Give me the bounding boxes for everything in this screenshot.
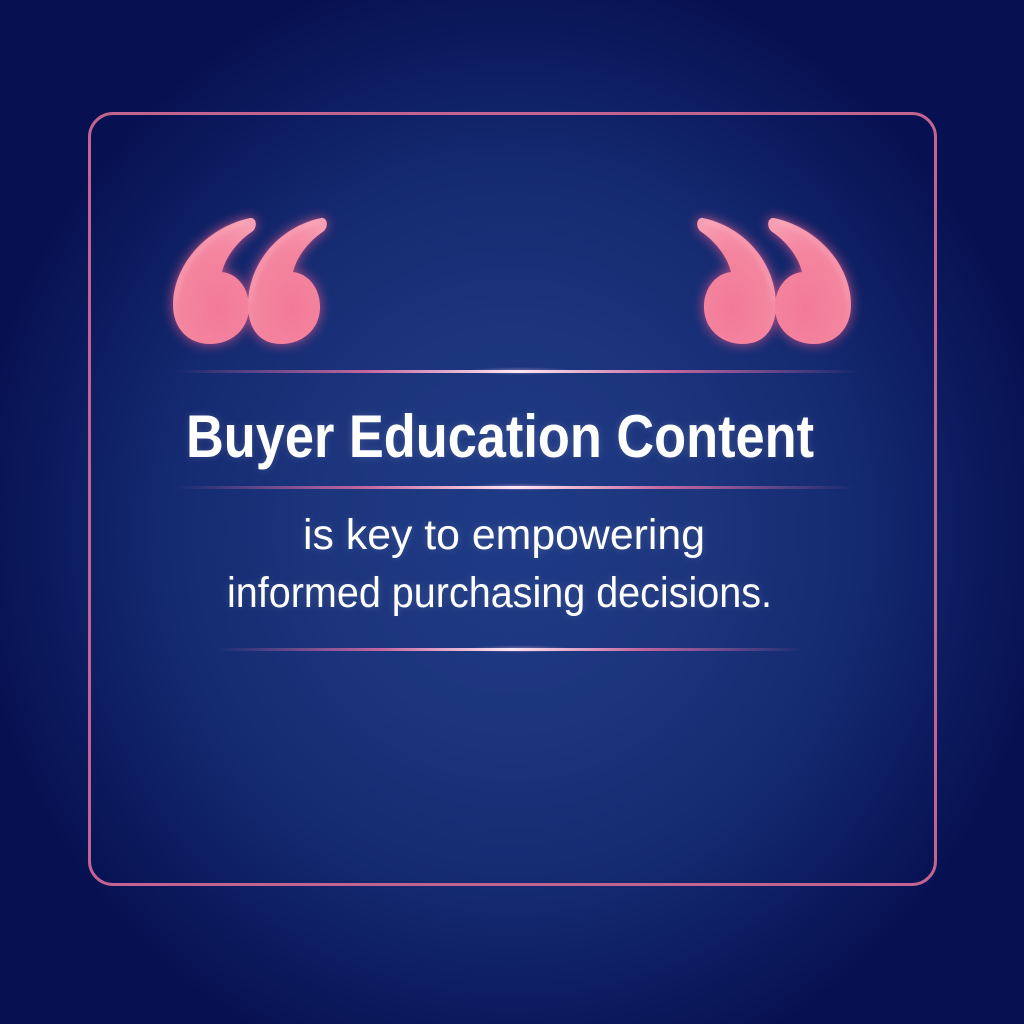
heading: Buyer Education Content: [186, 403, 814, 470]
panel: quote frame: [88, 112, 937, 886]
text block: subtitle: informed purchasing decisions.: [227, 569, 772, 617]
text block: subtitle: is key to empowering: [303, 511, 705, 559]
